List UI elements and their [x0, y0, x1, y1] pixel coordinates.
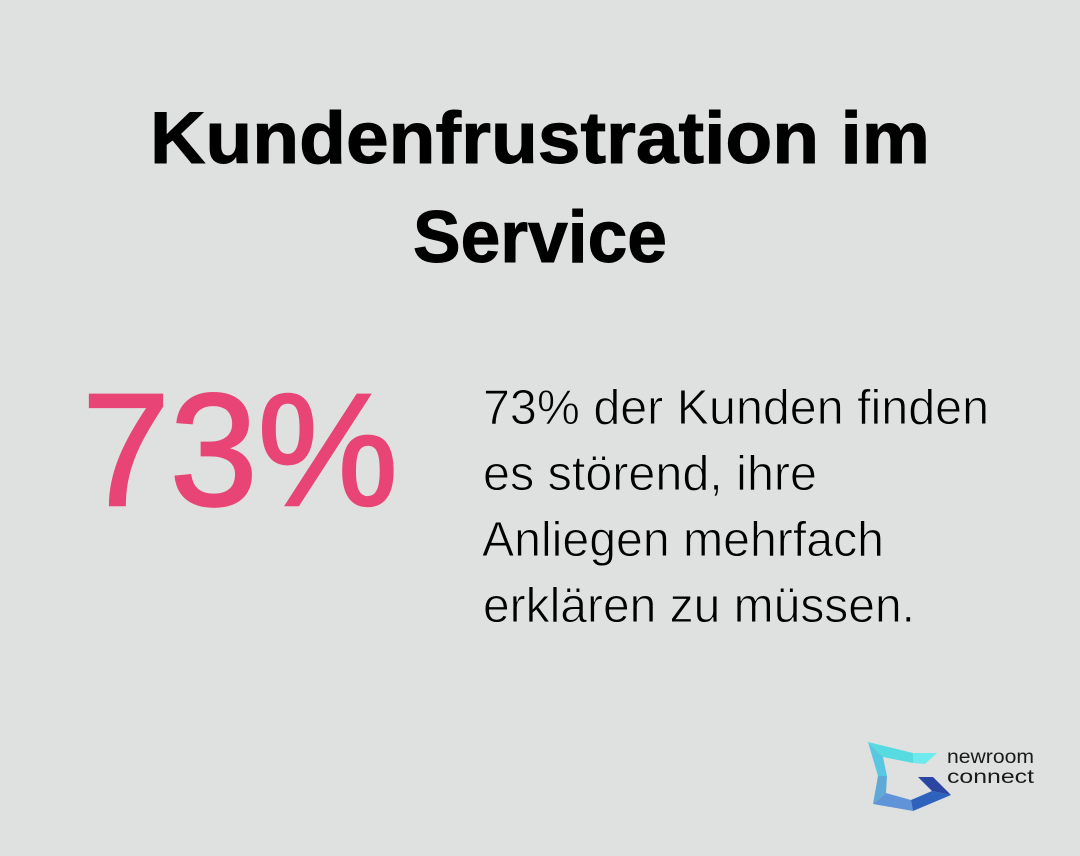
description text	[482, 381, 989, 633]
logo wordmark: connect	[947, 767, 1035, 788]
description text: Anliegen mehrfach	[482, 513, 884, 567]
big statistic: 73%: 73%	[82, 360, 398, 539]
title	[150, 98, 930, 278]
title: Service	[413, 197, 667, 278]
description text: es störend, ihre	[483, 447, 817, 501]
title: Kundenfrustration im	[150, 98, 930, 179]
description text: erklären zu müssen.	[483, 579, 915, 633]
logo mark	[868, 742, 951, 811]
description text: 73% der Kunden finden	[483, 381, 989, 435]
logo: newroom connect	[868, 742, 1035, 811]
logo wordmark	[947, 747, 1035, 788]
logo wordmark: newroom	[947, 747, 1034, 768]
